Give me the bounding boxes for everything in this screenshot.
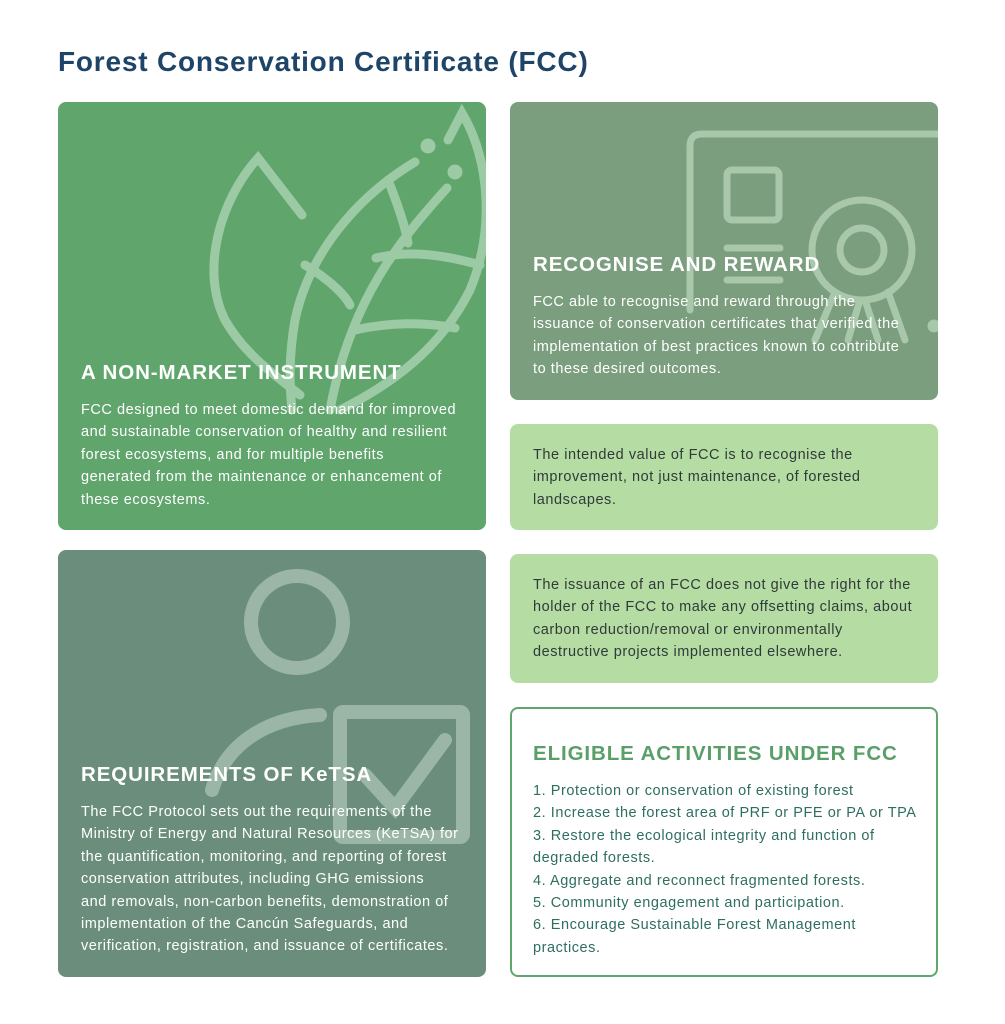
panel: requirements of KeTSA	[58, 550, 486, 977]
text block: implementation of the Cancún Safeguards, and	[81, 916, 408, 932]
list: 6. Encourage Sustainable Forest Management	[533, 917, 856, 933]
text block: destructive projects implemented elsewhere.	[533, 644, 843, 660]
text block: generated from the maintenance or enhancement of	[81, 469, 442, 485]
list: 5. Community engagement and participation.	[533, 895, 845, 911]
text block: the quantification, monitoring, and reporting of forest	[81, 849, 447, 865]
text block	[81, 402, 456, 508]
list: 1. Protection or conservation of existing forest	[533, 783, 854, 799]
text block: Ministry of Energy and Natural Resources (KeTSA) for	[81, 826, 459, 842]
text block: FCC designed to meet domestic demand for improved	[81, 402, 456, 418]
text block: The intended value of FCC is to recognise the	[533, 447, 853, 463]
text block: FCC able to recognise and reward through the	[533, 294, 855, 310]
panel: recognise and reward	[510, 102, 938, 400]
panel: eligible activities	[510, 707, 938, 977]
text block: holder of the FCC to make any offsetting claims, about	[533, 599, 912, 615]
text block: and removals, non-carbon benefits, demonstration of	[81, 894, 448, 910]
list: 4. Aggregate and reconnect fragmented forests.	[533, 873, 865, 889]
text block: conservation attributes, including GHG emissions	[81, 871, 424, 887]
text block: carbon reduction/removal or environmentally	[533, 622, 843, 638]
panel: intended value	[510, 424, 938, 530]
list	[533, 783, 916, 956]
text block	[533, 447, 861, 508]
heading: A NON-MARKET INSTRUMENT	[81, 361, 402, 384]
list: 3. Restore the ecological integrity and function of	[533, 828, 875, 844]
text block: landscapes.	[533, 492, 616, 508]
text block: implementation of best practices known to contribute	[533, 339, 899, 355]
text block: The FCC Protocol sets out the requirements of the	[81, 804, 432, 820]
text block: improvement, not just maintenance, of forested	[533, 469, 861, 485]
text block	[81, 804, 459, 954]
list: 2. Increase the forest area of PRF or PFE or PA or TPA	[533, 805, 916, 821]
text block: The issuance of an FCC does not give the right for the	[533, 577, 911, 593]
heading: REQUIREMENTS OF KeTSA	[81, 763, 372, 786]
text block	[533, 294, 899, 377]
list: degraded forests.	[533, 850, 655, 866]
text block	[533, 577, 912, 660]
text block: issuance of conservation certificates that verified the	[533, 316, 899, 332]
title: Forest Conservation Certificate (FCC)	[58, 46, 589, 77]
panel: offsetting claims	[510, 554, 938, 683]
list: practices.	[533, 940, 601, 956]
heading: ELIGIBLE ACTIVITIES UNDER FCC	[533, 742, 898, 765]
text block: to these desired outcomes.	[533, 361, 721, 377]
text block: verification, registration, and issuance of certificates.	[81, 938, 448, 954]
panel: non-market instrument	[58, 102, 486, 530]
heading: RECOGNISE AND REWARD	[533, 253, 820, 276]
text block: these ecosystems.	[81, 492, 210, 508]
text block: and sustainable conservation of healthy and resilient	[81, 424, 447, 440]
text block: forest ecosystems, and for multiple benefits	[81, 447, 384, 463]
